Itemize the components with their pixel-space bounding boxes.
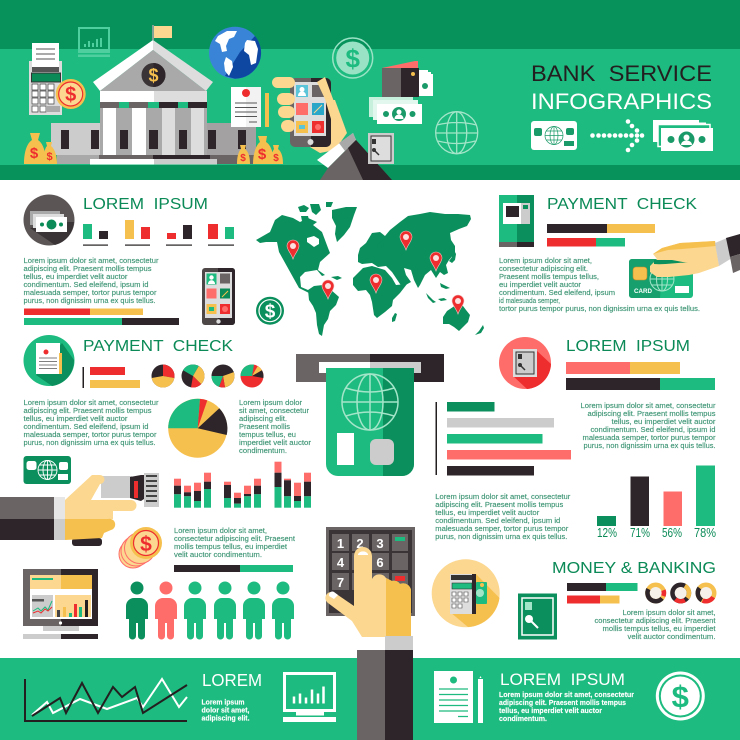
panel: payment check right [499, 195, 740, 313]
bar chart: stacked columns [174, 462, 311, 508]
arrow: dotted arrow [590, 119, 644, 152]
heading: LOREM IPSUM [500, 670, 625, 689]
icon: money bags [24, 133, 283, 164]
panel: lorem ipsum right [499, 337, 716, 540]
text block: center [435, 492, 571, 541]
heading: LOREM IPSUM [83, 196, 208, 213]
text block: Praesent mollis [239, 422, 290, 431]
bar chart: percent columns: 12% [597, 525, 617, 540]
icon: safe box [368, 133, 394, 164]
keypad: 6 [376, 555, 384, 570]
text block: Lorem ipsum dolor [239, 398, 303, 407]
keypad: 7 [337, 575, 344, 590]
text block: sit amet, consectetur [239, 406, 310, 415]
text block [594, 608, 716, 641]
stacked progress bars [24, 308, 179, 325]
icon: document in circle [24, 335, 74, 386]
text block: condimentum. Sed eleifend, ipsum id [590, 425, 716, 434]
keypad: 4 [337, 555, 345, 570]
cuff and sleeve [357, 636, 413, 740]
text block: condimentum. Sed eleifend, ipsum [499, 288, 615, 297]
stacked progress bars [547, 224, 655, 246]
text block: condimentum. [499, 714, 547, 723]
icon: white monitor [283, 674, 336, 722]
icon: money bags: $ [30, 145, 39, 162]
icon: earth globe [209, 27, 261, 79]
text block: consectetur adipiscing elit. [499, 264, 588, 273]
bar chart: two bars [82, 367, 140, 388]
icon: light dollar circle: $ [345, 44, 360, 74]
text block: Lorem ipsum dolor sit amet, consectetur [580, 401, 716, 410]
bar chart: percent columns: 56% [662, 525, 682, 540]
text block [174, 526, 296, 559]
icon: bank building: $ [148, 66, 159, 86]
text block: purus, non dignissim urna ex quis tellus. [584, 441, 716, 450]
text block: adipiscing elit. Praesent mollis tempus [588, 409, 716, 418]
panel: people and coins [23, 526, 296, 640]
title: BANK SERVICE [531, 61, 712, 86]
panel: money and banking [432, 559, 717, 641]
text block: consectetur adipiscing elit. Praesent [594, 616, 716, 625]
text block: condimentum. [239, 446, 287, 455]
bar chart: percent columns [597, 466, 716, 540]
text block: adipiscing elit. [239, 414, 287, 423]
heading: LOREM [202, 670, 262, 690]
icon: people row [126, 582, 294, 640]
panel: header banner [0, 0, 740, 180]
icon: wallet with notes [382, 61, 433, 97]
text block: tellus, eu imperdiet velit auctor [24, 272, 128, 281]
text block: condimentum. Sed eleifend, ipsum id [24, 280, 148, 289]
bar chart: percent columns: 71% [630, 525, 650, 540]
icon: card slot [296, 354, 444, 382]
title [531, 61, 712, 114]
panel: payment check left [0, 335, 312, 546]
text block: mollis tempus tellus, eu imperdiet [174, 542, 288, 551]
icon: money bags: $ [273, 153, 279, 164]
icon: contract document [231, 87, 269, 127]
pie charts: small row [152, 364, 264, 388]
heading: LOREM IPSUM [566, 338, 690, 355]
icon: green dollar coin: $ [265, 302, 276, 322]
panel: lorem ipsum bank notes [24, 194, 284, 325]
icon: green safe [518, 594, 557, 640]
bar chart: horizontal bars [436, 402, 571, 476]
text block [499, 256, 700, 313]
text block: center: malesuada semper, tortor purus tempor [435, 524, 569, 533]
text block: adipiscing elit. Praesent mollis tempus [24, 264, 152, 273]
pie chart: large [168, 399, 227, 458]
text block: dolor sit amet, [202, 706, 250, 714]
stacked progress bars [567, 583, 638, 604]
icon: hand pressing keypad [325, 527, 415, 740]
panel: footer band [0, 658, 740, 740]
icon: white document [434, 671, 483, 723]
donut charts [644, 581, 717, 605]
keypad: 3 [376, 536, 384, 551]
icon: money bags: $ [258, 146, 267, 163]
text block: id malesuada semper, [499, 296, 560, 305]
icon: desktop monitor [23, 569, 98, 639]
text block: center: purus, non dignissim urna ex quis tellus. [435, 532, 567, 541]
text block: mollis tempus tellus, eu imperdiet [602, 624, 716, 633]
bar chart: percent columns: 78% [694, 525, 716, 540]
text block: tellus, eu imperdiet velit auctor [499, 706, 602, 715]
icon: green bank card [24, 456, 71, 484]
icon: bank building [51, 25, 256, 164]
keypad [326, 527, 415, 616]
text block: center: condimentum. Sed eleifend, ipsum id [435, 516, 560, 525]
text block: condimentum. Sed eleifend, ipsum id [24, 422, 148, 431]
icon: bank card in hand: CARD [634, 288, 652, 295]
text block: adipiscing elit. Praesent mollis tempus [24, 406, 152, 415]
icon: calculator and card in circle [432, 559, 500, 627]
icon: bank notes in circle [24, 194, 74, 246]
text block: center: Lorem ipsum dolor sit amet, consectetur [435, 492, 571, 501]
icon: bank card in hand [629, 234, 740, 298]
text block [239, 398, 312, 455]
icon: outline globe [436, 112, 478, 154]
icon: green dollar coin [256, 297, 284, 325]
icon: stacked coins: $ [140, 533, 152, 556]
icon: stacked coins [119, 527, 162, 568]
text block: Lorem ipsum [202, 698, 245, 706]
icon: hand holding phone [272, 77, 392, 180]
text block: center: tellus, eu imperdiet velit auctor [435, 508, 540, 517]
text block: malesuada semper, tortor purus tempor [24, 288, 157, 297]
text block [24, 256, 159, 305]
text block: purus, non dignissim urna ex quis tellus. [24, 438, 156, 447]
icon: ATM machine [499, 195, 534, 247]
keypad: 2 [356, 536, 364, 551]
icon: white dollar circle [656, 672, 705, 720]
text block: eu imperdiet velit auctor [499, 280, 582, 289]
icon: dollar coin: $ [65, 84, 76, 106]
text block: tellus, eu imperdiet velit auctor [612, 417, 716, 426]
text block: velit auctor condimentum. [628, 632, 716, 641]
heading: MONEY & BANKING [552, 560, 716, 577]
icon: white bank card [531, 121, 577, 150]
icon: stack of bank notes [369, 97, 422, 124]
line chart [25, 679, 187, 721]
icon: calculator with receipt [29, 43, 62, 115]
icon: large card [326, 368, 414, 476]
text block: adipiscing elit. Praesent mollis tempus [499, 698, 626, 707]
text block: purus, non dignissim urna ex quis tellus. [24, 296, 156, 305]
bar chart: mini columns [83, 220, 234, 246]
text block: Lorem ipsum dolor sit amet, [622, 608, 716, 617]
text block: imperdiet velit auctor [239, 438, 312, 447]
icon: tablet [202, 268, 235, 325]
panel: central bank card in slot [296, 354, 444, 476]
stacked progress bars [566, 362, 715, 390]
text block: malesuada semper, tortor purus tempor [24, 430, 157, 439]
heading: PAYMENT CHECK [83, 338, 233, 355]
pins [287, 231, 464, 314]
text block: tellus, eu imperdiet velit auctor [24, 414, 128, 423]
text block: Lorem ipsum dolor sit amet, [174, 526, 267, 535]
text block: tortor purus tempor purus, non dignissim urna ex quis tellus. [499, 304, 700, 313]
title: INFOGRAPHICS [531, 89, 712, 114]
icon: light dollar circle [333, 38, 373, 78]
icon: safe in red circle [499, 337, 551, 389]
icon: hand with barcode scanner [0, 473, 159, 546]
text block: consectetur adipiscing elit. Praesent [174, 534, 296, 543]
text block [202, 698, 250, 722]
icon: white bank notes [653, 120, 713, 151]
icon: outline monitor [78, 28, 110, 57]
text block: velit auctor condimentum. [174, 550, 262, 559]
text block [499, 690, 634, 723]
text block [24, 398, 159, 447]
progress bar [174, 565, 293, 572]
text block: Lorem ipsum dolor sit amet, consectetur [24, 398, 159, 407]
text block: center: adipiscing elit. Praesent mollis tempus [435, 500, 564, 509]
hand [325, 547, 411, 637]
text block: Lorem ipsum dolor sit amet, consectetur [24, 256, 159, 265]
text block: malesuada semper, tortor purus tempor [582, 433, 716, 442]
text block: Praesent mollis tempus tellus, [499, 272, 599, 281]
text block: adipiscing elit. [202, 714, 250, 722]
icon: money bags: $ [240, 153, 246, 164]
heading: PAYMENT CHECK [547, 196, 697, 213]
icon: money bags: $ [46, 151, 53, 163]
icon: white dollar circle: $ [672, 679, 689, 714]
text block [580, 401, 716, 450]
text block: Lorem ipsum dolor sit amet, [499, 256, 592, 265]
keypad: 1 [337, 536, 344, 551]
chart: world map with location pins [256, 202, 484, 336]
text block: Lorem ipsum dolor sit amet, consectetur [499, 690, 634, 699]
text block: tempus tellus, eu [239, 430, 296, 439]
icon: dollar coin [56, 79, 86, 109]
